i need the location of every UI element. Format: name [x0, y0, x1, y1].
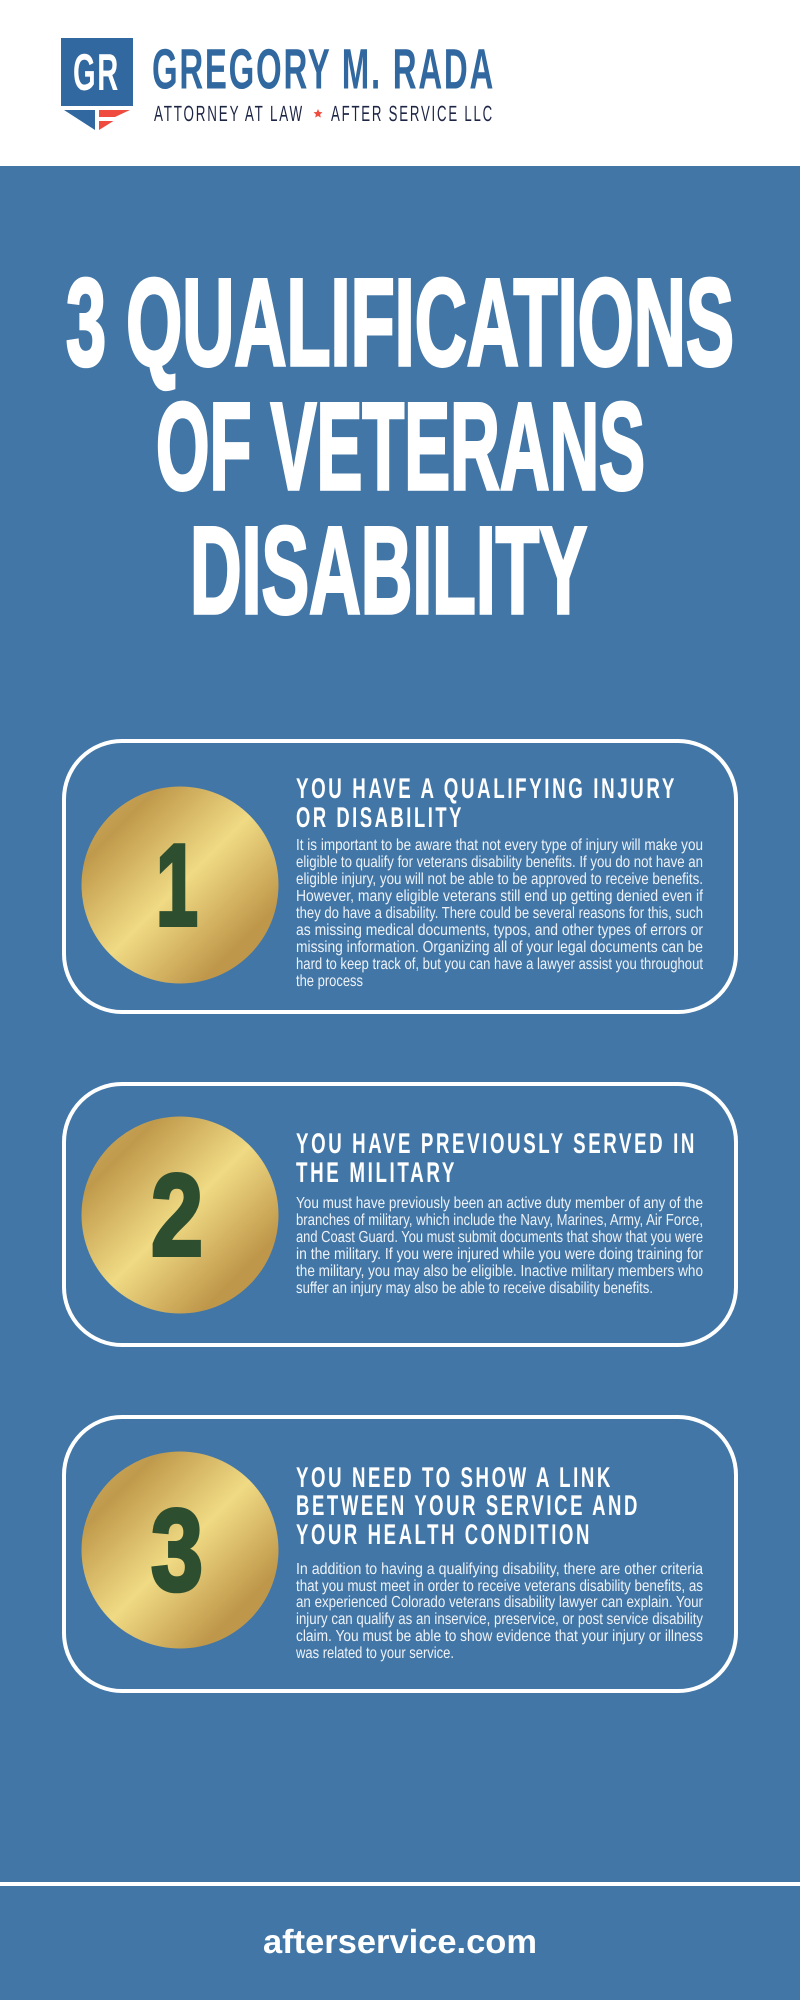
number badge 1: 1 [156, 820, 198, 950]
body text 1: It is important to be aware that not every type of injury will make you [296, 837, 703, 854]
body text 3: injury can qualify as an inservice, preservice, or post service disability [296, 1611, 703, 1628]
panel: qualification 1 [64, 741, 736, 1012]
number badge 2: 2 [151, 1150, 203, 1280]
body text 1: eligible to qualify for veterans disability benefits. If you do not have an [296, 854, 703, 871]
website address: afterservice.com [263, 1924, 537, 1961]
body text 1: the process [296, 973, 363, 990]
body text 3: In addition to having a qualifying disability, there are other criteria [296, 1561, 703, 1578]
body text 1: they do have a disability. There could be several reasons for this, such [296, 905, 703, 922]
panel: qualification 3 [64, 1417, 736, 1691]
icon: GR logo shield: GR [73, 44, 120, 102]
heading 2 [296, 1128, 697, 1189]
body text 2: and Coast Guard. You must submit documents that show that you were [296, 1229, 703, 1246]
title [66, 254, 734, 640]
icon: GR logo shield [61, 38, 133, 130]
panel: qualification 2 [64, 1084, 736, 1345]
body text 2: You must have previously been an active duty member of any of the [296, 1195, 703, 1212]
heading 2: THE MILITARY [296, 1157, 457, 1189]
heading 3: YOU NEED TO SHOW A LINK [296, 1462, 613, 1494]
body text 2: in the military. If you were injured while you were doing training for [296, 1246, 704, 1263]
firm tagline: AFTER SERVICE LLC [331, 101, 494, 126]
body text 1: However, many eligible veterans still end up getting denied even if [296, 888, 703, 905]
body text 1: eligible injury, you will not be able to be approved to receive benefits. [296, 871, 703, 888]
body text 3 [295, 1561, 704, 1662]
body text 1 [296, 837, 704, 990]
body text 3: claim. You must be able to show evidence that your injury or illness [296, 1628, 703, 1645]
body text 2: the military, you may also be eligible. Inactive military members who [296, 1263, 703, 1280]
body text 3: was related to your service. [295, 1645, 454, 1662]
body text 3: an experienced Colorado veterans disability lawyer can explain. Your [296, 1594, 704, 1611]
header band [0, 0, 800, 166]
body text 2: branches of military, which include the Navy, Marines, Army, Air Force, [296, 1212, 703, 1229]
heading 1 [296, 773, 677, 834]
body text 3: that you must meet in order to receive veterans disability benefits, as [296, 1578, 703, 1595]
heading 1: OR DISABILITY [296, 802, 464, 834]
firm tagline: ATTORNEY AT LAW [154, 101, 304, 126]
body text 2: suffer an injury may also be able to receive disability benefits. [296, 1280, 653, 1297]
body text 1: as missing medical documents, typos, and other types of errors or [296, 922, 704, 939]
heading 3 [296, 1462, 640, 1551]
heading 3: YOUR HEALTH CONDITION [296, 1519, 592, 1551]
number badge 2 [82, 1116, 278, 1314]
body text 1: missing information. Organizing all of your legal documents can be [296, 939, 703, 956]
body text 2 [296, 1195, 704, 1297]
number badge 1 [82, 786, 278, 984]
number badge 3 [82, 1452, 278, 1648]
body text 1: hard to keep track of, but you can have a lawyer assist you throughout [296, 956, 703, 973]
footer [0, 1882, 800, 1961]
number badge 3: 3 [151, 1485, 203, 1615]
firm name: GREGORY M. RADA [152, 38, 495, 102]
